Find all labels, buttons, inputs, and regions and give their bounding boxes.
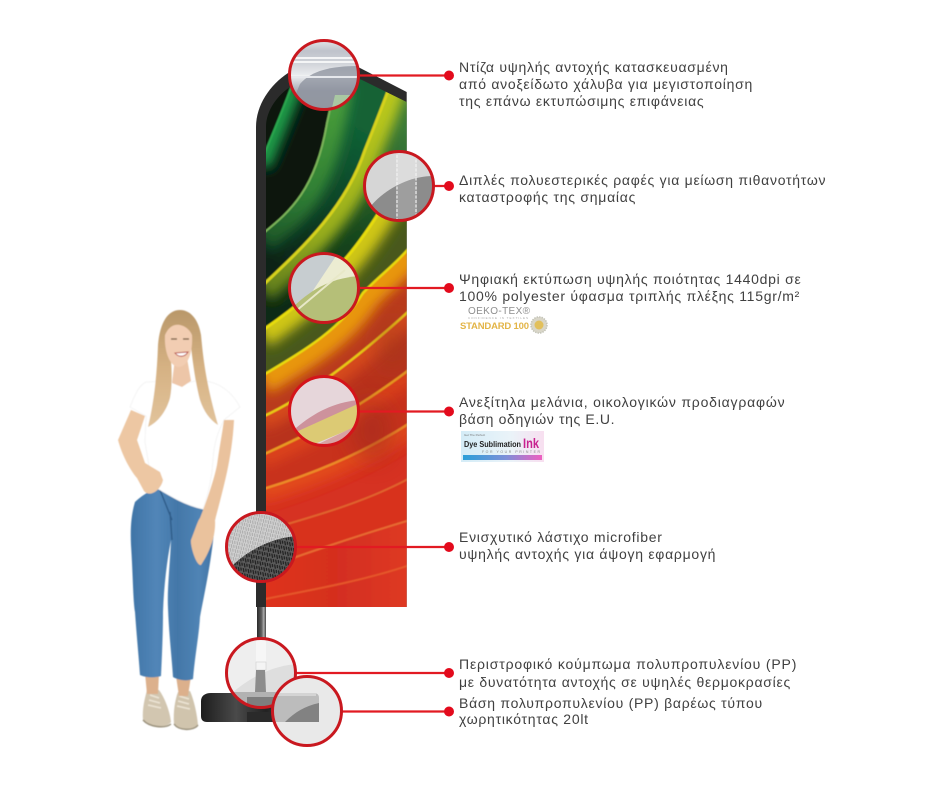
flag printed bands (266, 79, 407, 607)
callout circle: steel rod (288, 40, 360, 112)
flag (256, 50, 410, 643)
text: steel rod: από ανοξείδωτο χάλυβα για μεγιστοποίηση (459, 76, 753, 92)
text: rotating joint (459, 656, 797, 690)
logo: dye sublimation ink: FOR YOUR PRINTER (482, 450, 540, 454)
text: base: Βάση πολυπροπυλενίου (PP) βαρέως τύπου (459, 695, 763, 711)
logo: dye sublimation ink: Dye Sublimation (464, 439, 521, 449)
callout circle: microfiber (225, 511, 297, 583)
callout circle: base (271, 675, 343, 747)
flag black sleeve (256, 62, 407, 607)
shirt (130, 380, 240, 509)
text: microfiber: υψηλής αντοχής για άψογη εφαρμογή (459, 546, 716, 562)
text: microfiber: Ενισχυτικό λάστιχο microfiber (459, 529, 663, 545)
callout circle: inks (288, 375, 360, 448)
neck (172, 358, 191, 387)
woman figure (118, 310, 240, 730)
text: steel rod: Ντίζα υψηλής αντοχής κατασκευασμένη (459, 59, 729, 75)
text: rotating joint: Περιστροφικό κούμπωμα πολυπροπυλενίου (PP) (459, 656, 797, 672)
text: base (459, 695, 763, 727)
connector lines (295, 76, 449, 712)
text: microfiber (459, 529, 716, 562)
text: steel rod: της επάνω εκτυπώσιμης επιφάνειας (459, 93, 704, 109)
marker dots (444, 70, 454, 716)
logo: OEKO-TEX standard 100: STANDARD 100 (460, 321, 529, 332)
text: steel rod (459, 59, 753, 109)
text: double seams: καταστροφής της σημαίας (459, 189, 636, 205)
text: digital print: 100% polyester ύφασμα τριπλής πλέξης 115gr/m² (459, 288, 800, 304)
infographic canvas (118, 39, 825, 747)
text: inks: Ανεξίτηλα μελάνια, οικολογικών προδιαγραφών (459, 394, 785, 410)
logo: dye sublimation ink (461, 431, 544, 462)
callout circle: rotating joint (225, 637, 297, 710)
logo: OEKO-TEX standard 100: CONFIDENCE IN TEXTILES (468, 316, 528, 320)
jeans (131, 488, 216, 680)
text: double seams (459, 172, 826, 205)
text: inks: βάση οδηγιών της E.U. (459, 411, 615, 427)
face (165, 325, 192, 367)
facial features (171, 338, 189, 340)
text: digital print (459, 271, 801, 304)
callout circle: digital print (288, 250, 362, 325)
left arm (118, 410, 163, 494)
hair (148, 310, 218, 427)
text: inks (459, 394, 785, 427)
logo: OEKO-TEX standard 100 (460, 306, 547, 333)
ankles (145, 673, 191, 696)
logo: dye sublimation ink: Get The Perfect (464, 433, 485, 437)
text: digital print: Ψηφιακή εκτύπωση υψηλής ποιότητας 1440dpi σε (459, 271, 801, 287)
text: base: χωρητικότητας 20lt (459, 711, 589, 727)
callout circle: double seams (364, 150, 434, 222)
pole (257, 607, 266, 643)
shoes (143, 690, 198, 730)
weighted base (201, 693, 319, 722)
logo: dye sublimation ink: Ink (523, 435, 539, 451)
text: double seams: Διπλές πολυεστερικές ραφές για μείωση πιθανοτήτων (459, 172, 826, 188)
right arm (191, 420, 234, 565)
logo: OEKO-TEX standard 100: OEKO-TEX® (468, 306, 531, 317)
text: rotating joint: με δυνατότητα αντοχής σε υψηλές θερμοκρασίες (459, 674, 791, 690)
